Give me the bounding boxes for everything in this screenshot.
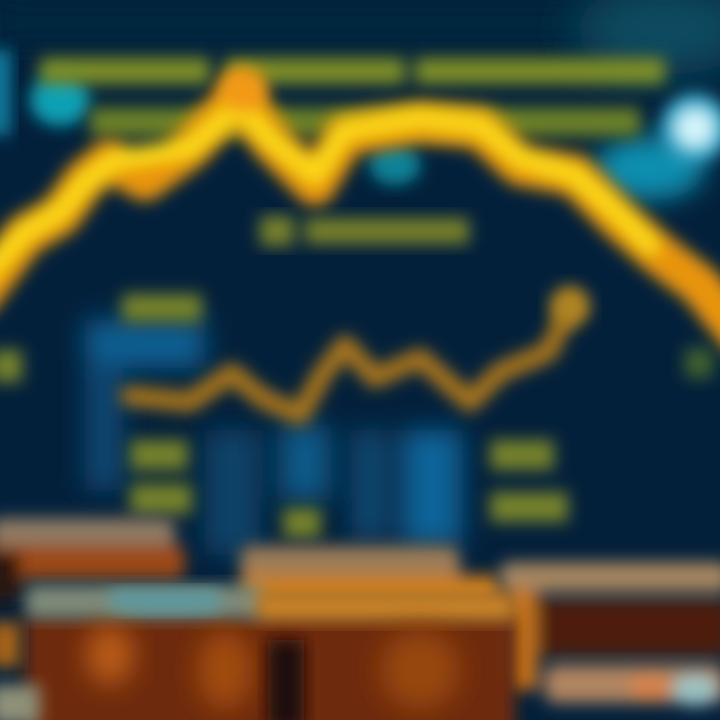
coin stack: right bbox=[500, 562, 720, 706]
subtitle text block bbox=[260, 216, 469, 246]
upper trend line bbox=[0, 95, 720, 335]
title text block bbox=[40, 58, 665, 136]
title peak highlight bbox=[219, 68, 267, 112]
inner trend line bbox=[130, 308, 570, 415]
inner trend end marker bbox=[550, 286, 590, 326]
coin stack: left bbox=[0, 518, 185, 602]
coin stack: front bbox=[0, 585, 515, 720]
chart value labels bbox=[0, 294, 713, 538]
bar chart bbox=[85, 320, 462, 555]
coin stack: centre bbox=[240, 546, 500, 601]
glowing light bbox=[661, 94, 720, 162]
